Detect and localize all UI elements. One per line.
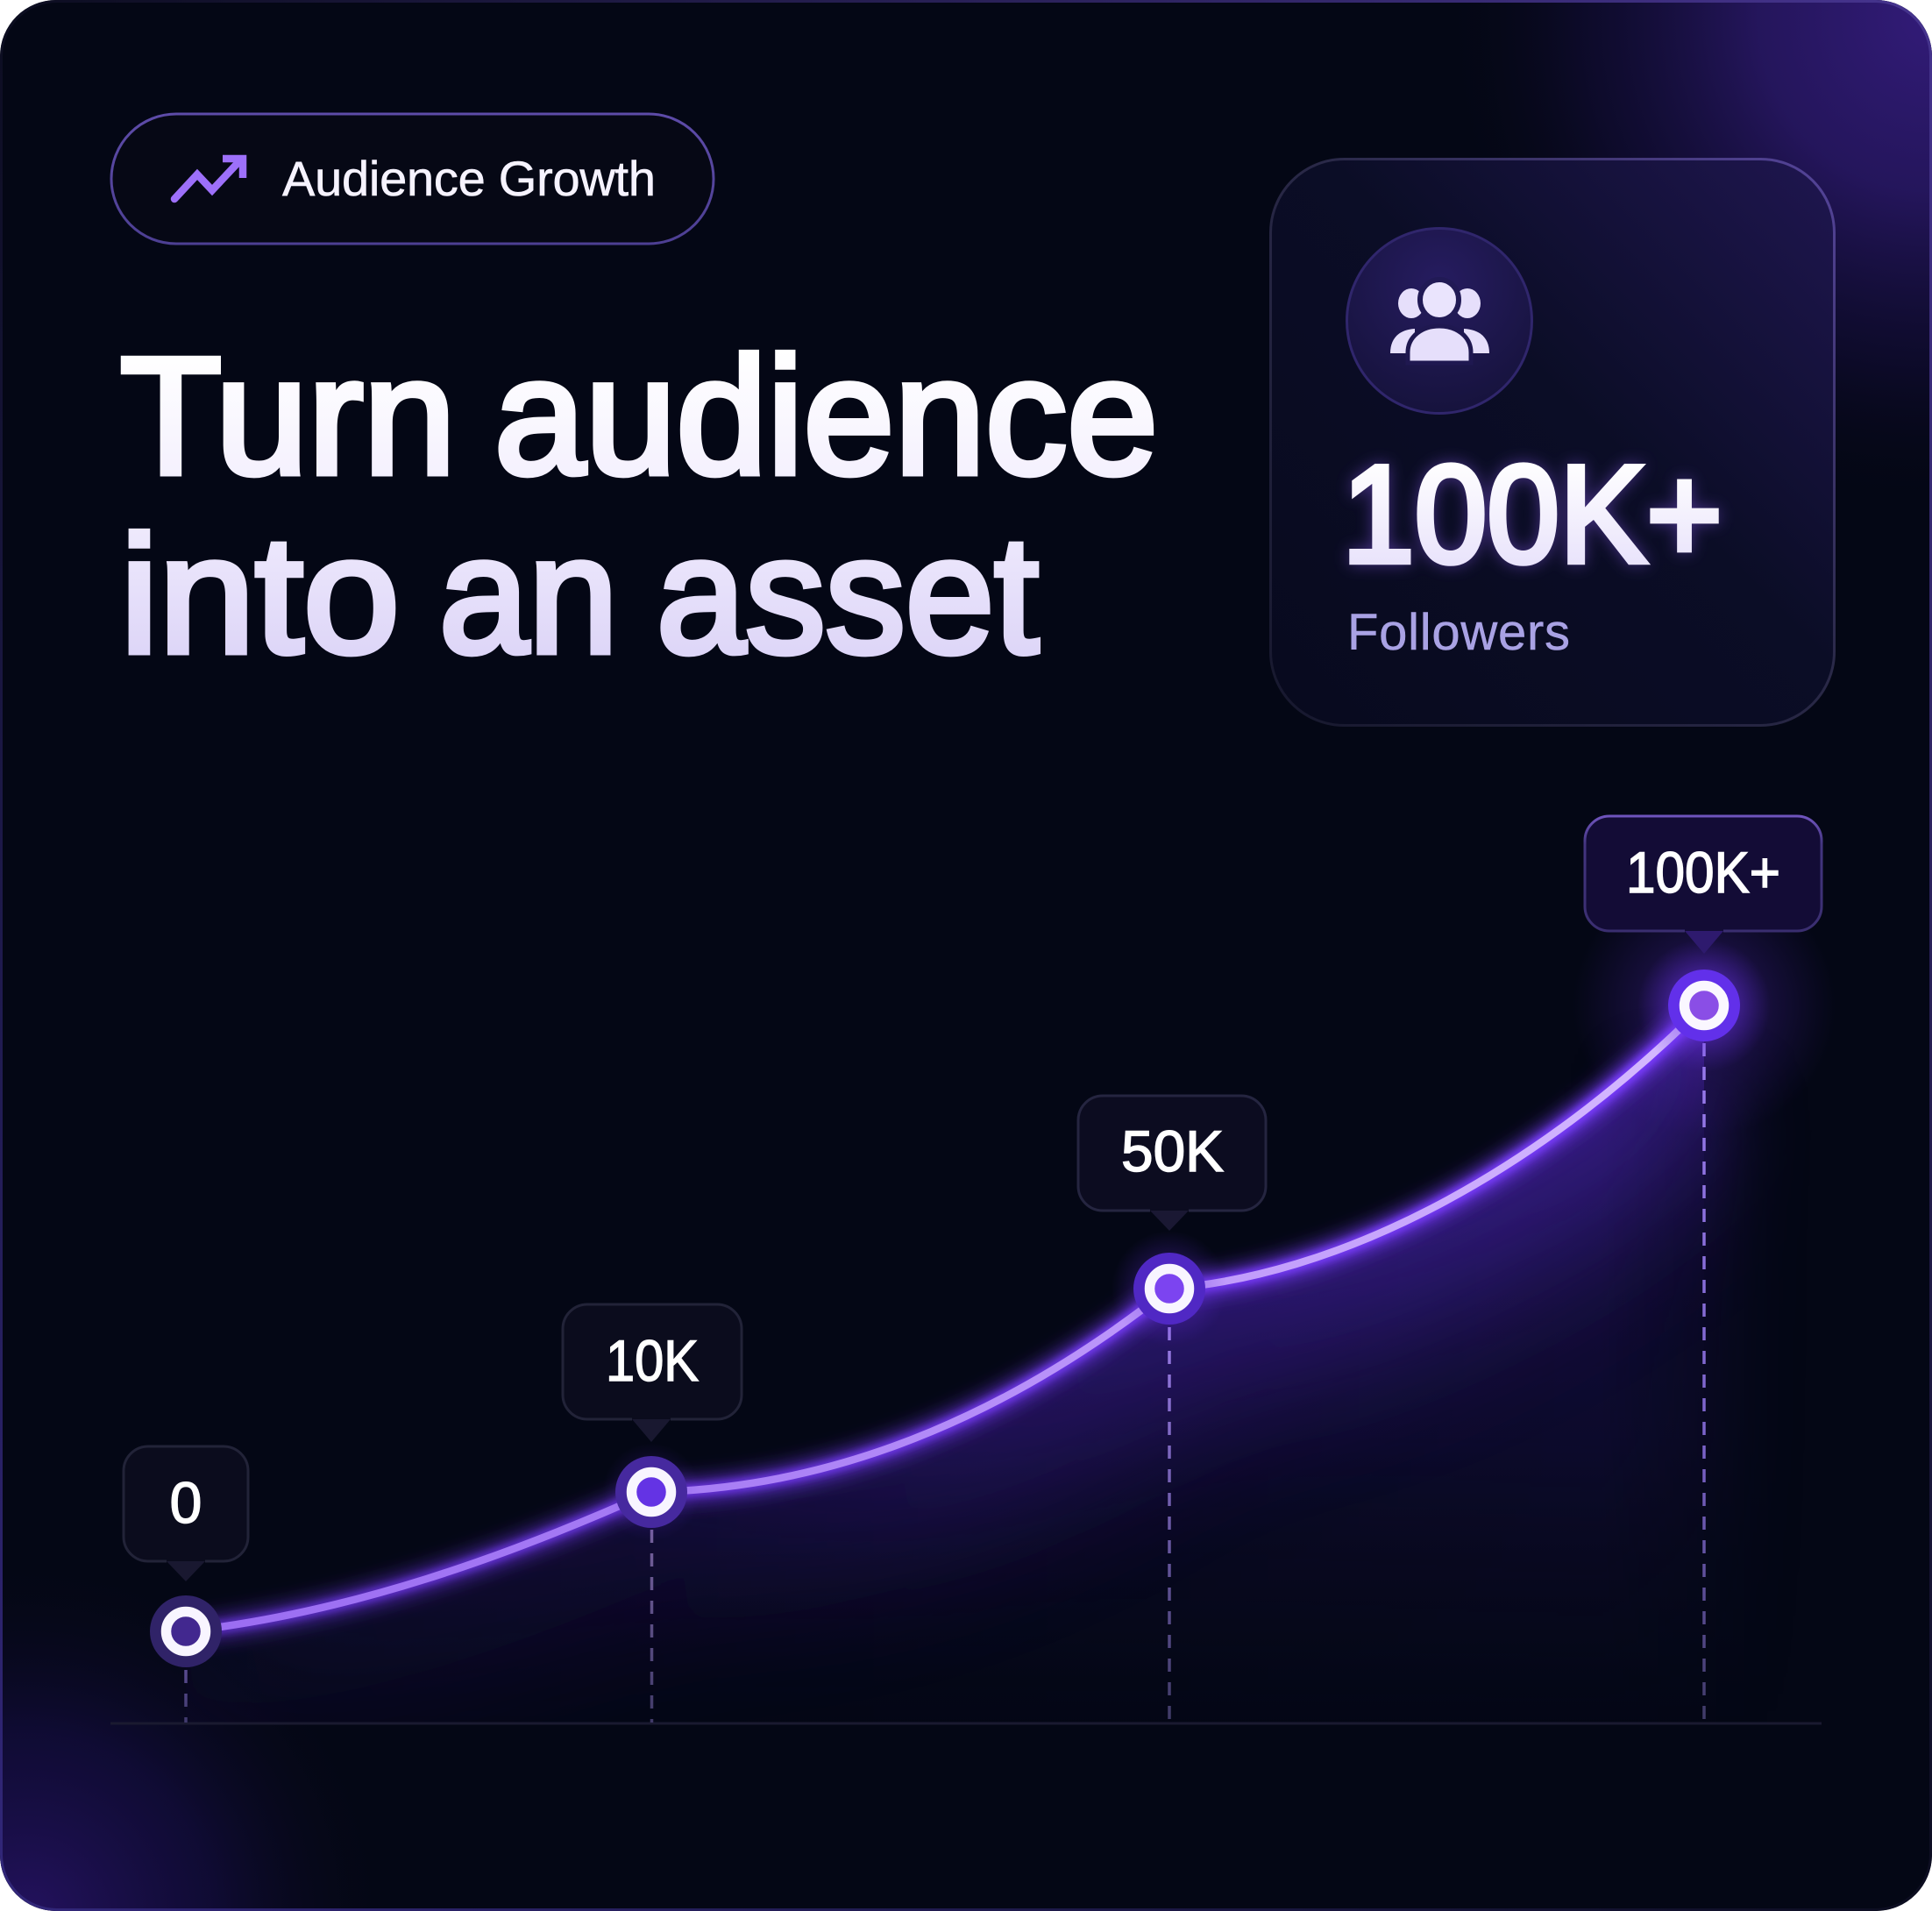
title: Turn xyxy=(120,323,456,509)
tooltip: 10K: 10K xyxy=(606,1328,699,1393)
stat label: Followers xyxy=(1347,604,1570,661)
baseline axis xyxy=(110,1722,1822,1725)
icon: people group in circle xyxy=(1346,228,1532,414)
tooltip: 100K+: 100K+ xyxy=(1626,840,1780,905)
title: asset xyxy=(657,502,1039,688)
badge: Audience Growth xyxy=(111,114,714,244)
tooltip: 100K+ xyxy=(1585,816,1822,954)
tooltip: 10K xyxy=(563,1304,742,1442)
dashed drop lines xyxy=(186,1043,1704,1723)
tooltip: 50K: 50K xyxy=(1121,1119,1224,1183)
data point: 10K xyxy=(602,1443,700,1541)
title: audience xyxy=(494,323,1158,509)
tooltip: 0 xyxy=(124,1446,248,1581)
data point: 50K xyxy=(1112,1231,1227,1346)
data point: 0 xyxy=(150,1595,222,1667)
area under curve xyxy=(210,1035,1762,1704)
badge label: Audience Growth xyxy=(282,151,656,206)
data point: 100K+ xyxy=(1637,939,1771,1072)
title: into xyxy=(120,502,400,688)
stat value: 100K+ xyxy=(1342,437,1722,592)
tooltip: 0: 0 xyxy=(170,1470,202,1535)
growth curve xyxy=(186,1005,1704,1631)
title: an xyxy=(439,502,618,688)
glow near top point xyxy=(1573,874,1836,1137)
panel: followers stat card xyxy=(1271,160,1834,726)
icon: trending up arrow xyxy=(174,159,243,199)
stat value: 100K+ xyxy=(1342,437,1722,592)
title xyxy=(120,323,1158,688)
growth chart xyxy=(110,816,1851,1724)
tooltip: 50K xyxy=(1078,1096,1266,1231)
